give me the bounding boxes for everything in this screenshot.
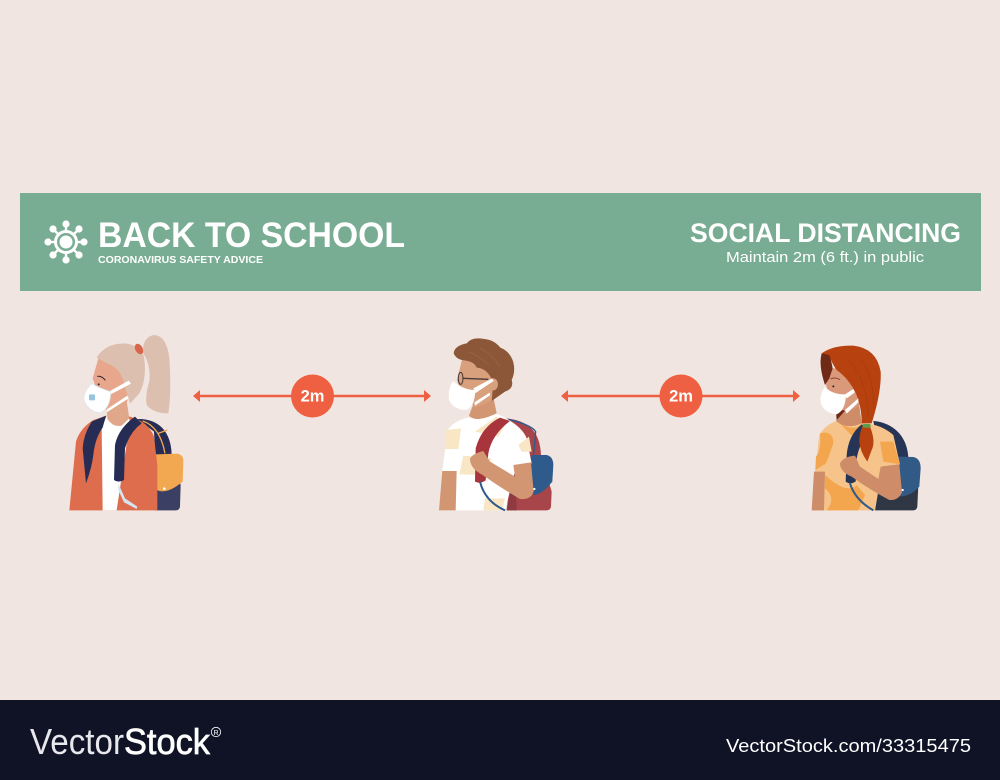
- distance arrow 1: 2m: [301, 388, 324, 406]
- strap: [475, 418, 510, 510]
- backpack: [137, 419, 183, 510]
- heading: social distancing: SOCIAL DISTANCING: [690, 218, 961, 248]
- light strap: [118, 483, 137, 509]
- watermark logo: Stock: [124, 721, 211, 762]
- dark hair: [821, 352, 845, 420]
- neck: [107, 397, 129, 426]
- mask: [449, 378, 494, 410]
- banner: [20, 193, 981, 291]
- image id: VectorStock.com/33315475: [726, 736, 971, 756]
- braid: [859, 426, 873, 462]
- backpack: [505, 418, 553, 510]
- hair tie: [863, 424, 871, 428]
- hand and arm: [840, 456, 904, 500]
- glasses: [458, 372, 488, 384]
- subtitle: CORONAVIRUS SAFETY ADVICE: [98, 254, 263, 266]
- lower arm: [439, 471, 457, 510]
- hair: [454, 338, 514, 401]
- registered mark: [211, 727, 221, 737]
- hand and arm: [470, 451, 535, 499]
- hair: [822, 346, 881, 423]
- face: [93, 358, 130, 410]
- distance arrow 2: [561, 374, 800, 418]
- hair: [97, 343, 145, 404]
- face: [457, 357, 499, 408]
- advice text: Maintain 2m (6 ft.) in public: [726, 249, 925, 266]
- t-shirt: [442, 414, 532, 510]
- jacket: [69, 416, 157, 510]
- watermark logo: Vector: [30, 721, 124, 762]
- person 1: blonde ponytail with orange jacket: [69, 335, 183, 510]
- scrunchie: [133, 342, 145, 356]
- footer bar: [0, 700, 1000, 780]
- face: [826, 368, 860, 414]
- distance arrow 2: 2m: [669, 388, 693, 406]
- registered mark: R: [214, 730, 219, 737]
- title: BACK TO SCHOOL: [98, 216, 405, 255]
- person 3: red braid with yellow shirt: [812, 346, 921, 510]
- shirt: [102, 416, 130, 510]
- person 2: curly hair with glasses and red backpack: [439, 338, 553, 510]
- straps: [83, 416, 142, 483]
- lower arm: [812, 472, 825, 510]
- strap: [846, 424, 873, 510]
- mask: [820, 387, 858, 414]
- backpack: [873, 421, 921, 510]
- neck: [836, 398, 862, 426]
- eye: [97, 376, 105, 385]
- ear: [489, 378, 498, 390]
- mask: [84, 381, 131, 413]
- neck: [469, 388, 497, 419]
- distance arrow 1: [193, 374, 431, 418]
- eye: [831, 378, 840, 387]
- icon: coronavirus: [44, 220, 88, 264]
- watermark logo: [30, 721, 211, 762]
- shirt: [813, 421, 900, 510]
- ponytail: [143, 335, 170, 413]
